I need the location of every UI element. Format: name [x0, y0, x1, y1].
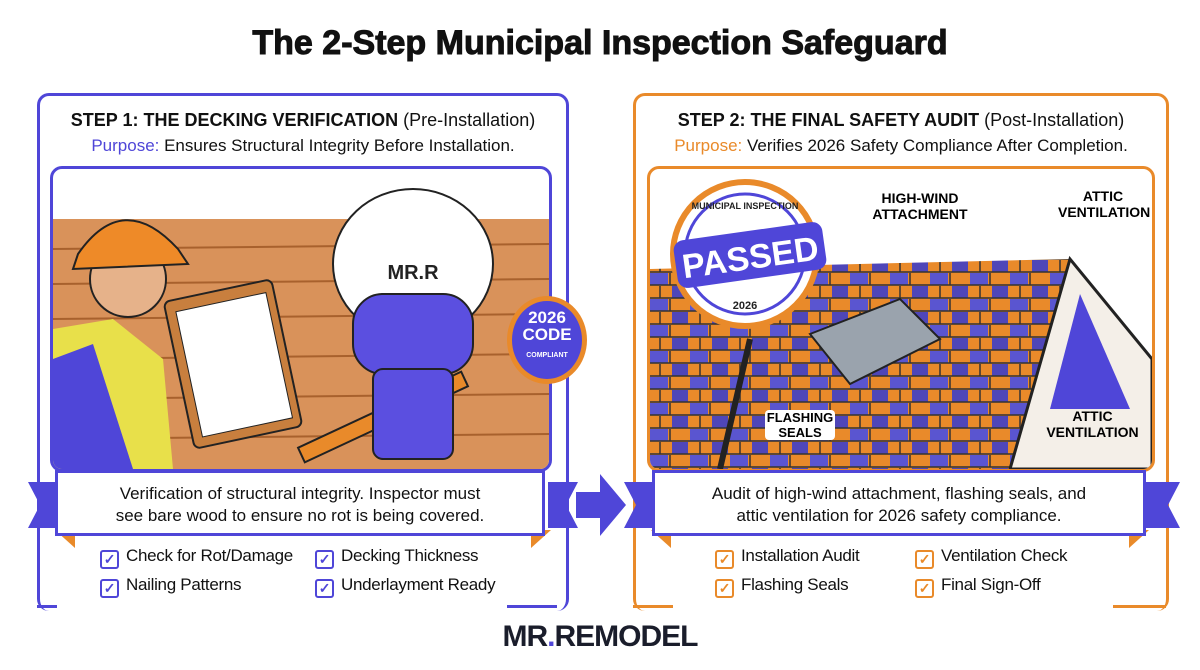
panel: step 1: [37, 93, 569, 611]
title: The 2-Step Municipal Inspection Safeguard: [252, 24, 948, 62]
illustration: roof: 2026: [733, 300, 757, 312]
callout: high-wind attachment: ATTACHMENT: [872, 206, 968, 222]
checklist: step 1: Underlayment Ready: [341, 575, 495, 594]
checklist: step 2: Flashing Seals: [741, 575, 848, 594]
callout: flashing seals: SEALS: [778, 425, 822, 440]
checklist: step 1: ✓: [319, 551, 330, 567]
step 1 heading: STEP 1: THE DECKING VERIFICATION (Pre-Installation): [71, 110, 535, 130]
badge: 2026 code compliant: [507, 296, 587, 384]
checklist: step 1: Nailing Patterns: [126, 575, 241, 594]
callout: flashing seals: FLASHING: [767, 410, 833, 425]
checklist: step 1: ✓: [104, 580, 115, 596]
frame bottom segments: [37, 605, 557, 608]
callout: attic ventilation bottom: ATTIC: [1072, 408, 1113, 424]
callout: high-wind attachment: [872, 190, 968, 222]
panel: step 2: [633, 93, 1169, 611]
logo: MR.REMODEL: [502, 620, 698, 653]
checklist: step 1: Check for Rot/Damage: [126, 546, 293, 565]
illustration: inspector and robot on decking: [50, 166, 552, 472]
callout: attic ventilation bottom: VENTILATION: [1046, 424, 1139, 440]
checklist: step 1: ✓: [319, 580, 330, 596]
illustration: roof: [647, 166, 1155, 472]
callout: attic ventilation bottom: [1046, 408, 1139, 440]
checklist: step 2: ✓: [719, 580, 730, 596]
checklist: step 2: ✓: [919, 551, 930, 567]
checklist: step 1: Decking Thickness: [341, 546, 478, 565]
banner: step 2: Audit of high-wind attachment, flashing seals, and: [712, 484, 1086, 503]
step 2 heading: STEP 2: THE FINAL SAFETY AUDIT (Post-Installation): [678, 110, 1124, 130]
illustration: roof: PASSED: [680, 230, 821, 286]
banner: step 1: [55, 470, 545, 536]
step 2 purpose: Purpose: Verifies 2026 Safety Compliance After Completion.: [674, 136, 1128, 155]
checklist: step 1: ✓: [104, 551, 115, 567]
arrow between steps: [576, 474, 626, 536]
illustration: inspector and robot on decking: MR.R: [387, 262, 439, 284]
checklist: step 2: Installation Audit: [741, 546, 859, 565]
ribbon tails step 1: [28, 482, 578, 548]
illustration: roof: MUNICIPAL INSPECTION: [692, 201, 798, 211]
checklist: step 2: Final Sign-Off: [941, 575, 1040, 594]
badge: 2026 code compliant: COMPLIANT: [526, 352, 568, 359]
callout: high-wind attachment: HIGH-WIND: [882, 190, 958, 206]
checklist: step 2: ✓: [919, 580, 930, 596]
checklist: step 2: [715, 546, 1068, 598]
callout: attic ventilation top: ATTIC: [1083, 188, 1123, 204]
callout: attic ventilation top: VENTILATION: [1058, 204, 1150, 220]
callout: attic ventilation top: [1058, 188, 1150, 220]
step 1 purpose: Purpose: Ensures Structural Integrity Before Installation.: [91, 136, 515, 155]
checklist: step 2: Ventilation Check: [941, 546, 1067, 565]
badge: 2026 code compliant: 2026: [528, 308, 566, 327]
banner: step 2: attic ventilation for 2026 safety compliance.: [736, 506, 1062, 525]
callout: flashing seals: [765, 410, 835, 440]
badge: 2026 code compliant: CODE: [522, 325, 572, 344]
checklist: step 1: [100, 546, 496, 598]
ribbon tails step 2: [624, 482, 1180, 548]
banner: step 2: [652, 470, 1146, 536]
banner: step 1: see bare wood to ensure no rot is being covered.: [116, 506, 484, 525]
banner: step 1: Verification of structural integrity. Inspector must: [120, 484, 480, 503]
checklist: step 2: ✓: [719, 551, 730, 567]
